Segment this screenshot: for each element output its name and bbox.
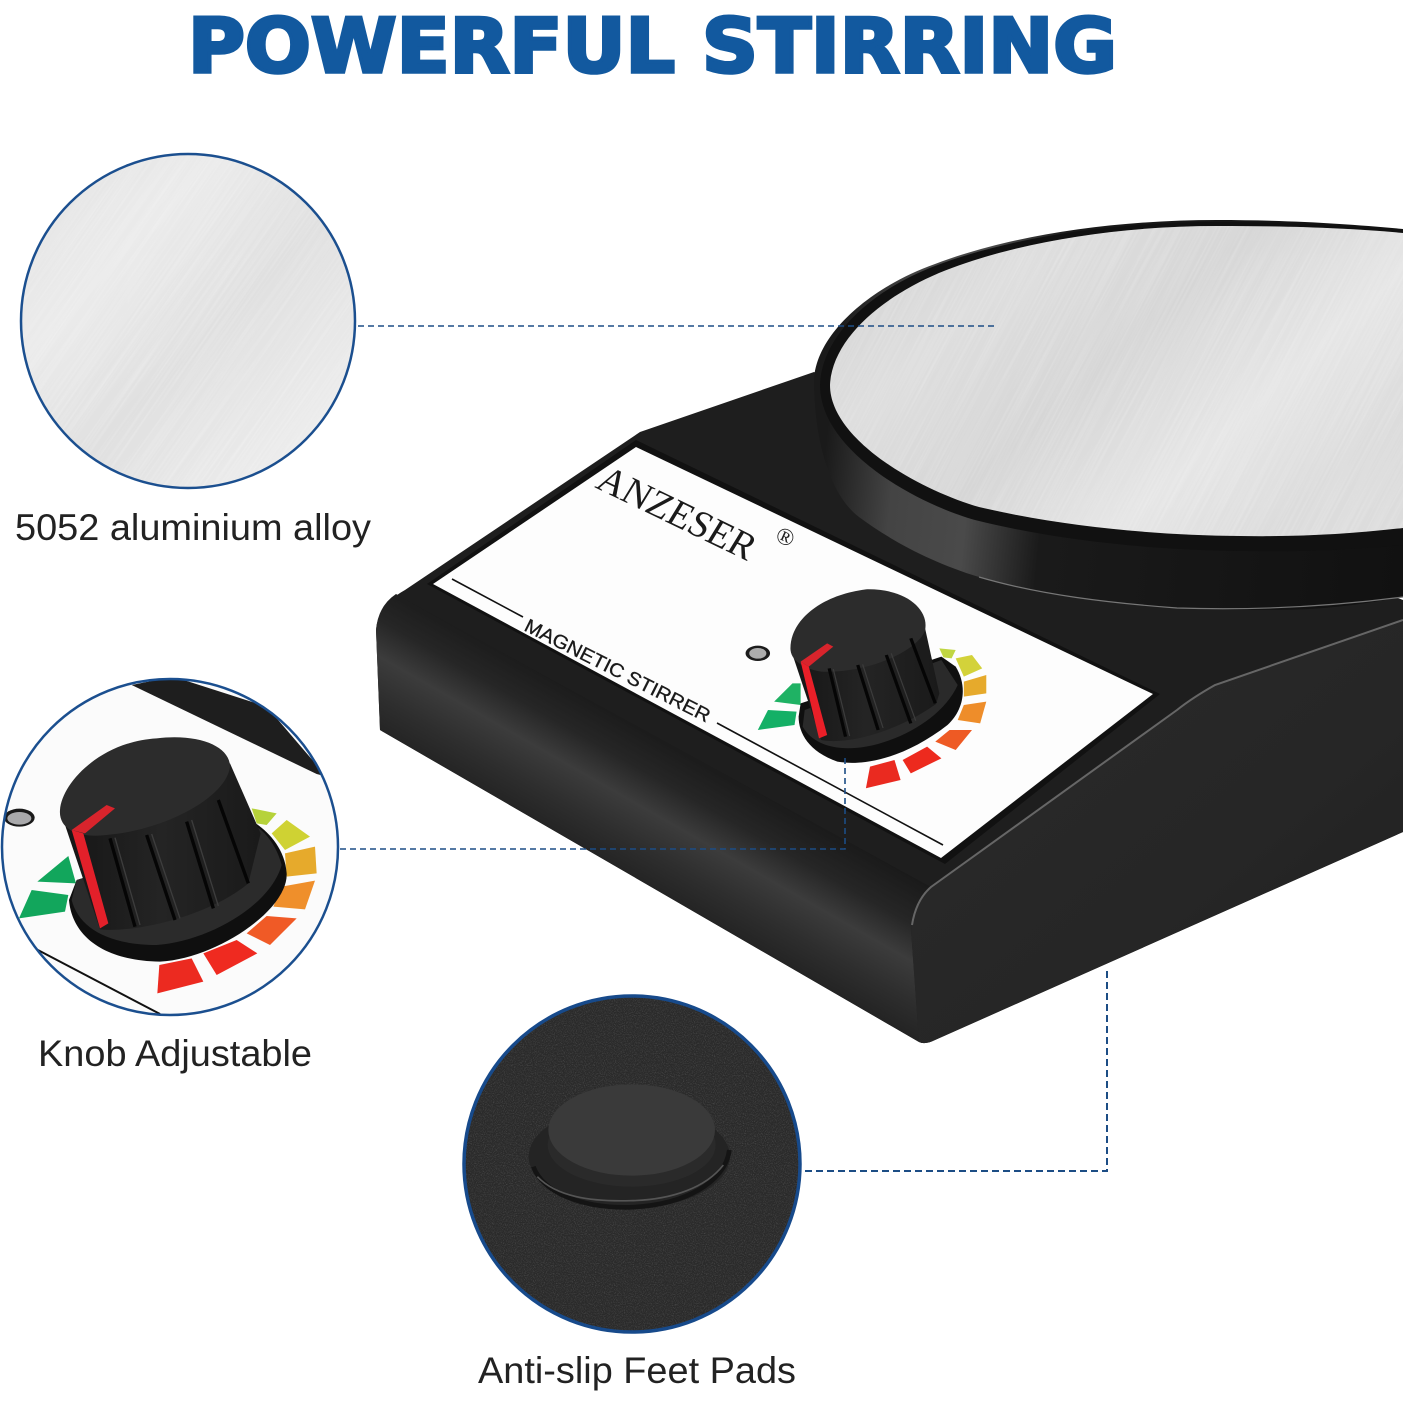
panel: aluminium callout	[20, 152, 356, 490]
label: aluminium: 5052 aluminium alloy	[15, 507, 371, 548]
speed knob	[790, 589, 963, 763]
registered mark: ®	[772, 522, 798, 553]
control panel label	[433, 447, 1153, 858]
product: magnetic stirrer	[376, 220, 1403, 1044]
brushed aluminium circle	[21, 154, 355, 488]
knob close-up	[4, 677, 327, 1014]
panel caption: MAGNETIC STIRRER	[521, 616, 714, 727]
aluminium disc rim	[814, 220, 1403, 610]
disc lip	[820, 222, 1403, 551]
indicator lens	[749, 648, 766, 659]
panel lower line	[717, 723, 943, 845]
stirrer right side face	[911, 620, 1403, 1043]
speed scale	[758, 648, 986, 788]
panel recess frame	[427, 440, 1160, 864]
brand name: ANZESER	[589, 458, 765, 569]
disc rim highlight	[979, 577, 1403, 609]
title: POWERFUL STIRRING	[188, 2, 1117, 90]
anti-slip pad	[529, 1084, 730, 1208]
panel: feet pad callout	[464, 996, 800, 1332]
connector: aluminium	[358, 325, 996, 327]
label: feet pads: Anti-slip Feet Pads	[478, 1350, 796, 1391]
panel upper line	[452, 579, 523, 617]
stirrer body top face	[376, 372, 1403, 1043]
connector: knob	[340, 755, 845, 849]
brushed texture on disc	[864, 226, 1400, 536]
aluminium disc surface	[830, 226, 1403, 536]
brushed texture	[0, 0, 606, 737]
label: knob: Knob Adjustable	[38, 1033, 312, 1074]
circle outline	[21, 154, 355, 488]
edge highlight	[912, 620, 1403, 925]
indicator light	[746, 646, 770, 661]
surface grain	[464, 996, 800, 1332]
panel: knob callout	[2, 677, 338, 1015]
speed scale and knob	[746, 589, 986, 788]
circle background	[2, 679, 338, 1015]
circle outline	[464, 996, 800, 1332]
textured base circle	[464, 996, 800, 1332]
stirrer front face	[376, 594, 931, 1042]
circle outline	[2, 679, 338, 1015]
connector: feet pads	[805, 968, 1107, 1171]
